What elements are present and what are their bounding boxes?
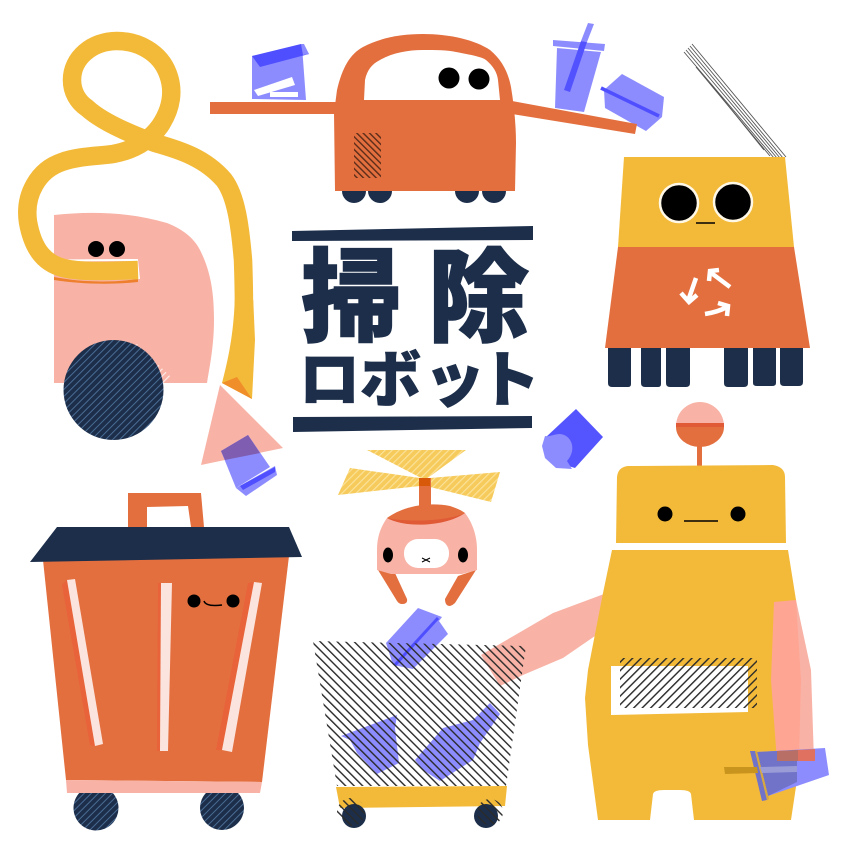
shelf robot window: [364, 50, 500, 100]
title bottom bar: [293, 416, 532, 432]
trash robot top right: [605, 44, 810, 387]
robot body: [585, 550, 803, 820]
vacuum nozzle: [201, 385, 283, 465]
title sub text: ッ: [424, 346, 485, 414]
cart wheels: [342, 804, 498, 828]
trash robot mouth: [696, 222, 715, 224]
title: [292, 226, 540, 432]
trash robot top: [618, 157, 794, 247]
title top bar: [292, 226, 533, 241]
cart with trash: [313, 608, 526, 828]
face patch: [404, 539, 449, 568]
title sub text: ロ: [299, 346, 360, 414]
bin face: [188, 594, 240, 608]
blue cup with straw: [553, 23, 605, 112]
trash bottle: [415, 703, 500, 781]
bin base: [66, 780, 262, 793]
blue food box: [601, 74, 664, 131]
antenna: [676, 402, 724, 467]
bin stripes: [62, 579, 262, 752]
robot pocket: [611, 658, 757, 715]
helicopter robot: [338, 450, 500, 606]
head strap left: [378, 570, 407, 604]
title sub text: ボ: [360, 346, 421, 414]
lid hatch lines: [684, 44, 786, 158]
cart hatching: [313, 641, 526, 786]
vacuum wheel: [64, 340, 172, 440]
head: [377, 507, 477, 574]
robot head: [616, 465, 786, 543]
right robot: [481, 402, 814, 820]
recycle arrows: [681, 270, 730, 316]
bin wheels: [74, 786, 244, 830]
trash top cup: [386, 608, 448, 669]
propeller: [338, 450, 500, 502]
shelf robot vent: [354, 133, 381, 178]
shelf robot eyes: [438, 68, 490, 90]
cart tray: [336, 786, 507, 808]
bin lid: [30, 527, 302, 562]
vacuum eyes: [88, 241, 125, 257]
title main text: 掃: [301, 243, 402, 355]
bin body: [43, 556, 289, 782]
shelf robot body: [334, 34, 516, 191]
title main text: 除: [428, 243, 529, 355]
hand-held cup: [724, 748, 829, 801]
blue box left on shelf: [252, 44, 309, 100]
robot face: [658, 506, 746, 522]
orange shelf robot: [334, 34, 516, 203]
wheel hatching: [337, 798, 503, 826]
robot right arm: [771, 600, 814, 761]
heli eyes: [383, 548, 468, 562]
vacuum robot: [27, 41, 283, 465]
trash robot legs: [608, 346, 803, 387]
bin handle: [128, 493, 204, 527]
shelf arms: [210, 101, 637, 134]
vacuum hose: [27, 41, 255, 399]
robot left arm: [481, 594, 604, 686]
trash bin robot: [30, 493, 302, 830]
title sub text: ト: [479, 346, 540, 414]
cap and stem: [387, 478, 465, 525]
heli mouth: [422, 558, 430, 562]
vacuum body: [54, 213, 214, 383]
shelf robot wheels: [342, 179, 506, 203]
head strap right: [445, 570, 476, 606]
trash robot eyes: [660, 183, 752, 222]
trash cup: [341, 715, 399, 774]
floating blue cup: [542, 409, 603, 469]
trash robot skirt: [605, 247, 810, 348]
blue cup on nozzle: [221, 435, 277, 496]
